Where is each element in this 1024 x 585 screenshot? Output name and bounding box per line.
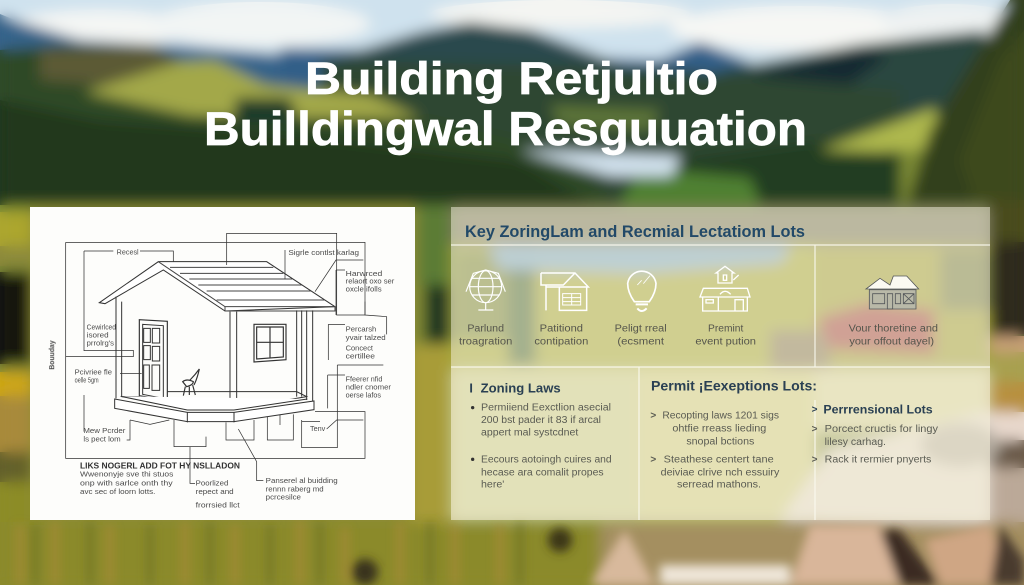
window <box>254 324 286 362</box>
title <box>204 53 807 155</box>
permit exceptions column: > <box>650 455 656 466</box>
diagram labels: Recesl <box>117 247 139 256</box>
diagram labels: avc sec of loorn lotts. <box>80 487 155 496</box>
diagram labels: Wwenonyje sve thi stuos <box>80 470 174 479</box>
diagram labels: Pcivriee fle <box>75 368 112 377</box>
house line drawing <box>66 233 387 483</box>
diagram labels: relaort oxo ser <box>346 277 395 286</box>
icon: house <box>866 276 919 309</box>
title: Building Retjultio <box>305 53 718 104</box>
permit exceptions column: snopal bctions <box>686 436 754 447</box>
chair <box>183 369 199 396</box>
icon labels: event pution <box>695 336 756 347</box>
panel: zoning and lots <box>451 207 990 520</box>
diagram labels: repect and <box>196 487 234 496</box>
diagram labels: Cewirlced <box>87 323 116 332</box>
professional lots column: > <box>812 405 818 416</box>
diagram labels: certillee <box>346 352 375 361</box>
diagram labels: Poorlized <box>196 479 228 488</box>
diagram labels: Concect <box>346 343 374 352</box>
zoning laws column: I <box>469 382 473 396</box>
panel heading: Key ZoringLam and Recmial Lectatiom Lots <box>465 222 805 241</box>
door <box>139 320 167 400</box>
professional lots column <box>812 402 938 466</box>
professional lots column: > <box>812 455 818 466</box>
icon labels: Vour thoretine and <box>849 324 938 335</box>
diagram labels: Mew Pcrder <box>83 426 126 435</box>
zoning laws column: Eecours aotoingh cuires and <box>481 455 612 466</box>
icon: globe <box>466 270 505 310</box>
icon labels: contipation <box>534 336 588 347</box>
professional lots column: Perrrensional Lots <box>823 402 933 416</box>
permit exceptions column: Steathese centert tane <box>664 455 774 466</box>
diagram labels: onp with sarlce onth thy <box>80 478 173 487</box>
diagram labels: LIKS NOGERL ADD FOT HY NSLLADON <box>80 460 240 470</box>
professional lots column: lilesy carhag. <box>825 437 886 448</box>
roof <box>99 262 335 311</box>
zoning laws column: Permiiend Eexctlion asecial <box>481 403 611 414</box>
icon labels: Premint <box>708 324 744 335</box>
icon: house with garage <box>541 273 588 310</box>
icon labels: Parlund <box>467 324 504 335</box>
dimension lines <box>66 233 387 483</box>
diagram labels: yvair talzed <box>346 333 386 342</box>
diagram labels: pcrcesilce <box>266 493 301 502</box>
zoning laws column: here' <box>481 480 504 491</box>
diagram labels: oxcle ifolls <box>346 285 382 294</box>
icon labels: Patitiond <box>540 324 583 335</box>
walls <box>116 297 313 410</box>
professional lots column: Rack it rermier pnyerts <box>825 455 931 466</box>
diagram labels: frorrsied llct <box>196 501 241 510</box>
permit exceptions column: deiviae clrive nch essuiry <box>661 467 779 478</box>
title: Builldingwal Resguuation <box>204 102 807 155</box>
permit exceptions column: > <box>650 411 656 422</box>
zoning laws column: hecase ara comalit propes <box>481 467 604 478</box>
icon labels: troagration <box>459 336 512 347</box>
professional lots column: Porcect cructis for lingy <box>825 424 938 435</box>
icon: permit building <box>700 266 750 311</box>
diagram labels: ndler cnomer <box>346 382 391 391</box>
diagram labels: Bouuday <box>49 340 56 370</box>
diagram labels: rennn raberg md <box>266 484 324 493</box>
zoning laws column: 200 bst pader it 83 if arcal <box>481 415 601 426</box>
diagram labels: Sigrle contlst karlag <box>288 248 359 257</box>
professional lots column: > <box>812 424 818 435</box>
deck <box>115 396 314 422</box>
diagram labels: prrolrg's <box>87 339 114 348</box>
zoning laws column: Zoning Laws <box>481 382 561 396</box>
diagram labels: isored <box>87 331 109 340</box>
icon: light bulb <box>628 271 656 311</box>
icon labels: (ecsment <box>617 336 664 347</box>
diagram labels: oelle 5gm <box>75 376 99 385</box>
icon labels <box>459 324 938 347</box>
icon labels: your offout dayel) <box>849 336 934 347</box>
diagram labels: Panserel al buidding <box>266 476 338 485</box>
permit exceptions column: Permit ¡Eexeptions Lots: <box>651 377 817 393</box>
permit exceptions column: ohtfie rreass lieding <box>672 424 766 435</box>
diagram labels: Tenv <box>310 424 325 433</box>
diagram labels <box>49 247 395 510</box>
permit exceptions column: serread mathons. <box>677 480 761 491</box>
diagram labels: ls pect lom <box>83 434 121 443</box>
zoning laws column: appert mal systcdnet <box>481 427 579 438</box>
zoning laws column <box>469 382 612 491</box>
diagram labels: Harwrced <box>346 269 382 278</box>
icon labels: Peligt rreal <box>615 324 667 335</box>
permit exceptions column: Recopting laws 1201 sigs <box>662 411 779 422</box>
permit exceptions column <box>650 377 817 491</box>
diagram labels: Percarsh <box>346 325 376 334</box>
panel: house diagram <box>30 207 415 520</box>
diagram labels: Ffeerer nfid <box>346 375 382 384</box>
diagram labels: oerse lafos <box>346 390 381 399</box>
